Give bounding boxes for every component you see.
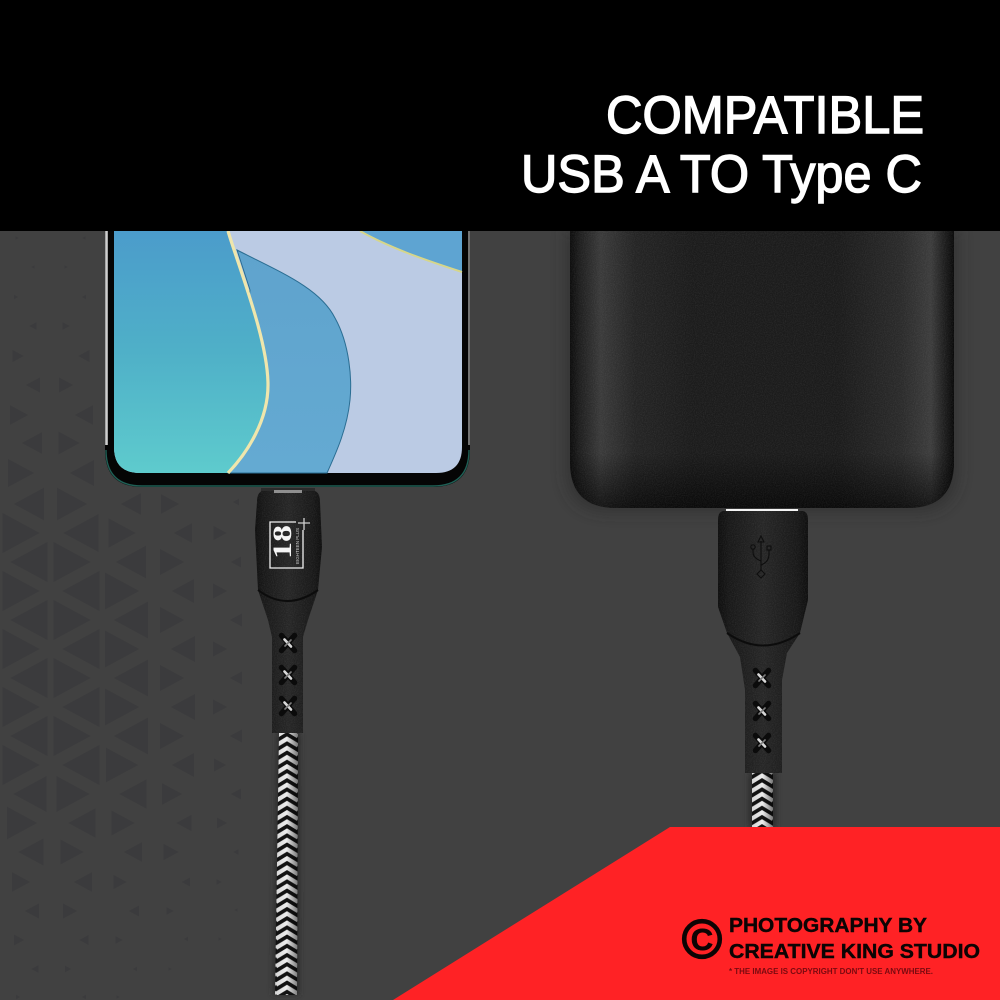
left connector boot <box>255 491 322 733</box>
icon: USB trident <box>751 536 771 578</box>
icon: copyright symbol: C <box>691 922 713 957</box>
phone silver edge left <box>105 225 108 445</box>
wallpaper left wave <box>114 231 268 473</box>
left strain relief cross cuts <box>282 636 294 714</box>
power bank <box>566 231 958 512</box>
title line 2: USB A TO Type C <box>521 145 922 204</box>
background triangle pattern <box>2 236 242 999</box>
power bank texture <box>570 231 954 508</box>
smartphone <box>105 225 470 492</box>
copyright credit <box>684 914 980 976</box>
logo small wordmark: EIGHTEEN PLUS <box>295 528 300 564</box>
right connector boot <box>718 511 808 773</box>
logo frame <box>270 522 303 568</box>
title line 1: COMPATIBLE <box>606 86 924 145</box>
credit line 2: CREATIVE KING STUDIO <box>729 940 980 963</box>
icon: copyright symbol <box>684 921 720 957</box>
power bank shadow <box>566 231 958 512</box>
logo number: 18 <box>268 525 297 559</box>
right cable shadow <box>749 773 776 827</box>
wallpaper top right arc <box>360 231 462 272</box>
title <box>521 86 924 204</box>
phone body <box>105 225 470 487</box>
phone charging port <box>261 488 315 492</box>
right boot collar <box>727 633 800 646</box>
right cable: USB-A <box>718 509 808 827</box>
right strain relief cross cuts <box>756 670 768 750</box>
left boot texture <box>255 491 322 733</box>
phone silver edge right <box>468 225 470 445</box>
left metal tip <box>274 490 302 493</box>
top right arc gold line <box>360 231 462 272</box>
wallpaper middle wave <box>228 250 351 473</box>
power bank shading <box>570 231 954 508</box>
logo plus <box>298 518 310 530</box>
left cable shading <box>275 733 298 995</box>
left cable shadow <box>273 733 300 995</box>
left boot collar <box>258 590 318 601</box>
right metal tip <box>726 509 798 511</box>
left cable: USB-C <box>255 490 322 995</box>
copyright notice: * THE IMAGE IS COPYRIGHT DON'T USE ANYWHERE. <box>729 966 933 976</box>
brand logo 18 plus <box>268 518 310 568</box>
credit line 1: PHOTOGRAPHY BY <box>729 914 927 937</box>
red corner panel <box>393 827 1000 1000</box>
right braided cable <box>752 773 773 827</box>
left braided cable <box>275 733 298 995</box>
power bank body <box>570 231 954 508</box>
wallpaper pale panel <box>114 231 462 473</box>
right boot texture <box>718 511 808 773</box>
phone screen <box>114 231 462 473</box>
header band <box>0 0 1000 231</box>
phone teal rim <box>106 450 469 486</box>
right cable shading <box>752 773 773 827</box>
gold line <box>228 231 268 473</box>
